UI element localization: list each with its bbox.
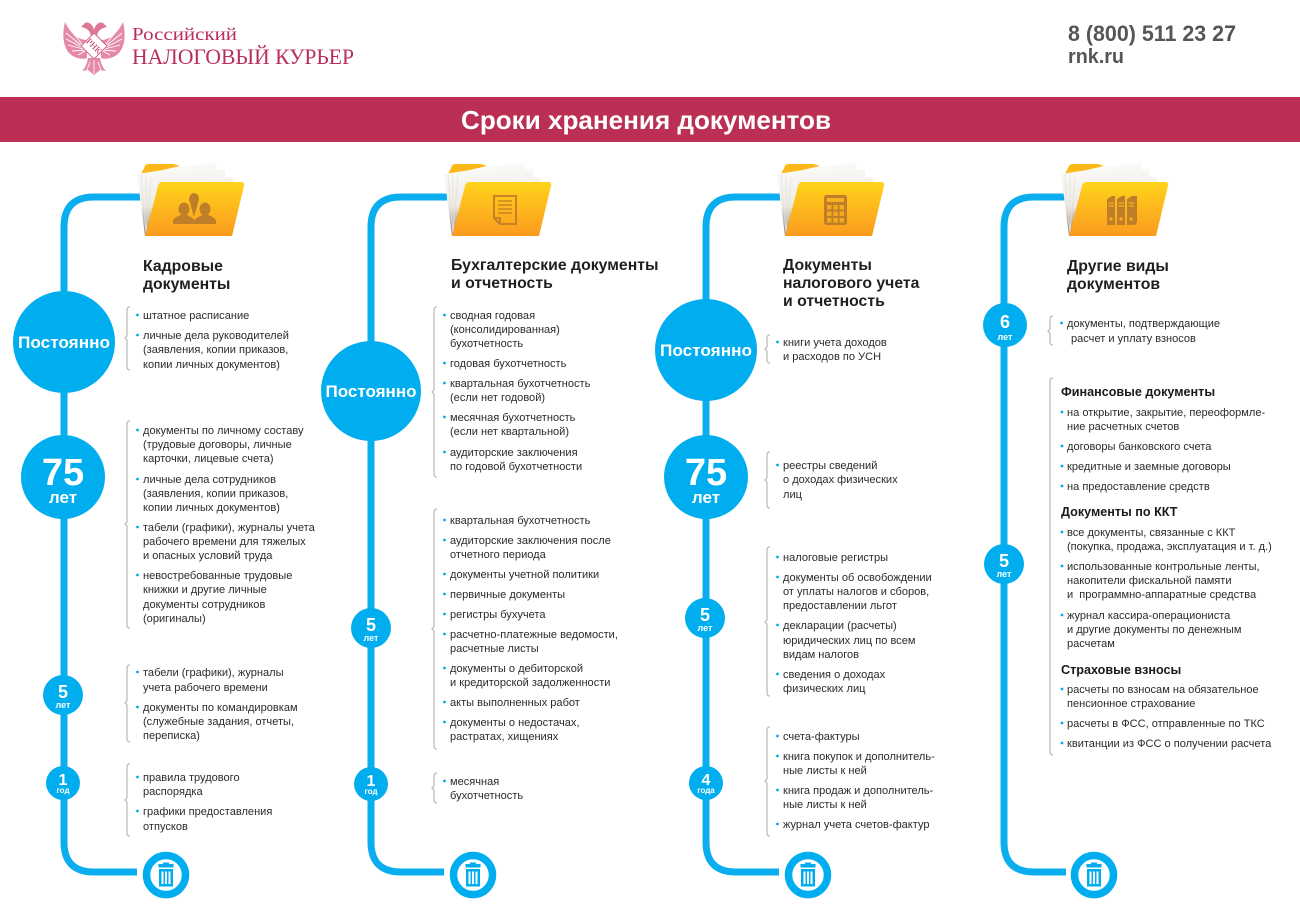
title banner — [0, 97, 1300, 142]
list: 75 лет: о доходах физических — [783, 474, 898, 486]
list: 1 год: бухотчетность — [450, 790, 523, 802]
list: 75 лет: лиц — [783, 489, 803, 501]
badge: 5 лет: 5 — [700, 605, 710, 625]
list: Постоянно: (если нет квартальной) — [450, 426, 569, 438]
list: 5 лет: документы об освобождении — [783, 572, 932, 584]
list: Постоянно: штатное расписание — [143, 310, 249, 322]
badge: Постоянно: Постоянно — [326, 382, 416, 401]
list: 5 лет: документы о недостачах, — [450, 717, 580, 729]
badge: 1 год: год — [56, 786, 70, 795]
list: 4 года — [765, 727, 935, 836]
list: 5 лет: декларации (расчеты) — [783, 620, 897, 632]
list: 5 лет: сведения о доходах — [783, 669, 886, 681]
heading: документы — [143, 276, 230, 293]
list: 1 год: месячная — [450, 776, 499, 788]
badge: 5 лет: 5 — [58, 682, 68, 702]
badge: Постоянно — [321, 341, 421, 441]
list: 5 лет: договоры банковского счета — [1067, 441, 1212, 453]
list: 5 лет: (покупка, продажа, эксплуатация и т. д.) — [1067, 541, 1272, 553]
badge: 4 года: года — [697, 786, 715, 795]
list: 5 лет: кредитные и заемные договоры — [1067, 461, 1231, 473]
badge: 6 лет: лет — [998, 332, 1013, 342]
list: Постоянно: аудиторские заключения — [450, 447, 578, 459]
icon: trash — [454, 856, 492, 894]
badge: 5 лет: лет — [364, 633, 379, 643]
list: 5 лет: отчетного периода — [450, 549, 547, 561]
list: Постоянно: квартальная бухотчетность — [450, 378, 591, 390]
timeline line — [64, 197, 140, 872]
list: 5 лет: ние расчетных счетов — [1067, 421, 1179, 433]
heading — [451, 257, 658, 292]
list: 5 лет: использованные контрольные ленты, — [1067, 561, 1260, 573]
list: 75 лет: документы сотрудников — [143, 599, 265, 611]
icon: folder with people — [137, 162, 244, 236]
list: Постоянно: бухотчетность — [450, 338, 523, 350]
list: 5 лет: документы по командировкам — [143, 702, 298, 714]
icon: trash — [788, 856, 828, 894]
badge: 4 года: 4 — [702, 772, 711, 789]
heading: Документы — [783, 257, 872, 274]
list: 5 лет: расчетные листы — [450, 643, 539, 655]
list: Постоянно: и расходов по УСН — [783, 351, 881, 363]
list: 5 лет: документы о дебиторской — [450, 663, 583, 675]
badge: 5 лет: 5 — [999, 551, 1009, 571]
list: 1 год: распорядка — [143, 786, 203, 798]
list: 5 лет: аудиторские заключения после — [450, 535, 611, 547]
heading: документов — [1067, 276, 1160, 293]
badge: 4 года — [689, 766, 723, 800]
list: Постоянно — [765, 335, 887, 363]
list: 5 лет — [1050, 378, 1272, 755]
list: 75 лет: рабочего времени для тяжелых — [143, 536, 306, 548]
subheading: Документы по ККТ: Документы по ККТ — [1061, 505, 1178, 519]
panel: Другие виды документов — [983, 162, 1272, 894]
list: 1 год — [432, 773, 523, 803]
panel: Документы налогового учета — [655, 162, 935, 894]
list: 4 года: книга покупок и дополнитель- — [783, 751, 935, 763]
list: 4 года: ные листы к ней — [783, 765, 867, 777]
list: 5 лет — [432, 509, 618, 749]
list: Постоянно: личные дела руководителей — [143, 330, 289, 342]
list: 5 лет: физических лиц — [783, 683, 866, 695]
list: 1 год: правила трудового — [143, 772, 240, 784]
list: 5 лет: юридических лиц по всем — [783, 635, 915, 647]
list: 5 лет: акты выполненных работ — [450, 697, 580, 709]
badge: 5 лет: 5 — [366, 615, 376, 635]
badge: 1 год: год — [364, 787, 378, 796]
list: 5 лет: документы учетной политики — [450, 569, 599, 581]
contacts: 8 (800) 511 23 27 — [1068, 21, 1236, 46]
list: 75 лет: (заявления, копии приказов, — [143, 488, 288, 500]
badge: 1 год — [354, 767, 388, 801]
badge: 5 лет — [351, 608, 391, 648]
badge: Постоянно — [655, 299, 757, 401]
list: 75 лет: реестры сведений — [783, 460, 877, 472]
list: 5 лет: и другие документы по денежным — [1067, 624, 1241, 636]
list: 5 лет: на предоставление средств — [1067, 481, 1210, 493]
badge: 5 лет — [984, 544, 1024, 584]
list: 5 лет: регистры бухучета — [450, 609, 546, 621]
list: 1 год: графики предоставления — [143, 806, 272, 818]
badge: 5 лет: лет — [997, 569, 1012, 579]
list: 1 год: отпусков — [143, 821, 188, 833]
list: 4 года: счета-фактуры — [783, 731, 860, 743]
list: 75 лет — [125, 421, 316, 628]
list: 75 лет: (трудовые договоры, личные — [143, 439, 292, 451]
list: 5 лет: табели (графики), журналы — [143, 667, 284, 679]
list: Постоянно — [432, 307, 591, 477]
list: 1 год — [125, 764, 272, 836]
heading — [783, 257, 920, 310]
list: 6 лет: расчет и уплату взносов — [1071, 333, 1196, 345]
badge: 1 год: 1 — [59, 772, 68, 789]
list: 6 лет — [1048, 316, 1220, 345]
list: 5 лет: (служебные задания, отчеты, — [143, 716, 294, 728]
badge: Постоянно: Постоянно — [18, 333, 110, 352]
list: 5 лет: от уплаты налогов и сборов, — [783, 586, 929, 598]
list: 5 лет: расчеты в ФСС, отправленные по ТКС — [1067, 718, 1265, 730]
heading: и отчетность — [451, 275, 553, 292]
list: 5 лет: расчетно-платежные ведомости, — [450, 629, 618, 641]
title banner: Сроки хранения документов — [461, 105, 831, 135]
list: 5 лет: на открытие, закрытие, переоформле- — [1067, 407, 1265, 419]
heading: и отчетность — [783, 293, 885, 310]
subheading: Страховые взносы: Страховые взносы — [1061, 663, 1181, 677]
badge: 6 лет: 6 — [1000, 312, 1010, 332]
list: 5 лет: учета рабочего времени — [143, 682, 268, 694]
heading: налогового учета — [783, 275, 920, 292]
badge: 75 лет: лет — [49, 488, 77, 507]
badge: 75 лет — [21, 435, 105, 519]
list: Постоянно: месячная бухотчетность — [450, 412, 576, 424]
badge: 75 лет: лет — [692, 488, 720, 507]
list: 4 года: книга продаж и дополнитель- — [783, 785, 934, 797]
list: 75 лет: (оригиналы) — [143, 613, 206, 625]
icon: double-headed eagle: РНК — [84, 36, 104, 56]
icon: double-headed eagle — [63, 22, 125, 75]
list: 75 лет: документы по личному составу — [143, 425, 304, 437]
list: 4 года: журнал учета счетов-фактур — [783, 819, 930, 831]
timeline line — [706, 197, 780, 872]
heading: Кадровые — [143, 258, 223, 275]
subheading: Финансовые документы: Финансовые документы — [1061, 385, 1215, 399]
list: 5 лет: видам налогов — [783, 649, 859, 661]
icon: trash — [1074, 856, 1114, 894]
icon: folder with document — [444, 162, 551, 236]
timeline line — [371, 197, 447, 872]
badge: 1 год — [46, 766, 80, 800]
icon: folder with calculator — [777, 162, 884, 236]
badge: 5 лет — [43, 675, 83, 715]
list: 75 лет: личные дела сотрудников — [143, 474, 276, 486]
badge: Постоянно: Постоянно — [660, 341, 752, 360]
list: 5 лет: первичные документы — [450, 589, 565, 601]
list: 5 лет: и кредиторской задолженности — [450, 677, 610, 689]
list: Постоянно: (консолидированная) — [450, 324, 560, 336]
panel: Бухгалтерские документы — [321, 162, 658, 894]
badge: 5 лет — [685, 598, 725, 638]
badge: 5 лет: лет — [698, 623, 713, 633]
badge: 1 год: 1 — [367, 773, 376, 790]
list: 5 лет: все документы, связанные с ККТ — [1067, 527, 1236, 539]
heading: Бухгалтерские документы — [451, 257, 658, 274]
logo wordmark — [132, 24, 354, 69]
badge: Постоянно — [13, 291, 115, 393]
list: Постоянно: сводная годовая — [450, 310, 535, 322]
logo wordmark: НАЛОГОВЫЙ КУРЬЕР — [132, 44, 354, 69]
logo wordmark: Российский — [132, 24, 237, 44]
badge: 75 лет: 75 — [685, 452, 727, 494]
badge: 75 лет — [664, 435, 748, 519]
list: 5 лет: квитанции из ФСС о получении расчета — [1067, 738, 1272, 750]
list: 5 лет: переписка) — [143, 730, 200, 742]
panel: Кадровые документы — [13, 162, 316, 894]
logo — [63, 22, 354, 75]
icon: folder with binders — [1061, 162, 1168, 236]
list: 6 лет: документы, подтверждающие — [1067, 318, 1220, 330]
badge: 5 лет: лет — [56, 700, 71, 710]
list: 5 лет: квартальная бухотчетность — [450, 515, 591, 527]
list: 5 лет: растратах, хищениях — [450, 731, 559, 743]
list: Постоянно: по годовой бухотчетности — [450, 461, 582, 473]
list: 75 лет — [765, 452, 898, 508]
heading — [143, 258, 230, 293]
list: 5 лет: пенсионное страхование — [1067, 698, 1195, 710]
badge: 75 лет: 75 — [42, 452, 84, 494]
list: 5 лет: расчеты по взносам на обязательное — [1067, 684, 1259, 696]
list: 5 лет — [765, 547, 932, 696]
heading — [1067, 258, 1169, 293]
list: Постоянно: копии личных документов) — [143, 359, 280, 371]
list: Постоянно: книги учета доходов — [783, 337, 887, 349]
list: 5 лет: предоставлении льгот — [783, 600, 897, 612]
list: 75 лет: книжки и другие личные — [143, 584, 267, 596]
contacts — [1068, 21, 1236, 68]
timeline line — [1004, 197, 1066, 872]
list: Постоянно: годовая бухотчетность — [450, 358, 567, 370]
list: 75 лет: копии личных документов) — [143, 502, 280, 514]
list: 5 лет: накопители фискальной памяти — [1067, 575, 1232, 587]
list: 5 лет: расчетам — [1067, 638, 1115, 650]
list: 4 года: ные листы к ней — [783, 799, 867, 811]
list: 75 лет: и опасных условий труда — [143, 550, 273, 562]
list: 75 лет: карточки, лицевые счета) — [143, 453, 274, 465]
list: 5 лет — [125, 665, 298, 742]
contacts: rnk.ru — [1068, 46, 1124, 68]
list: 75 лет: табели (графики), журналы учета — [143, 522, 316, 534]
list: Постоянно: (если нет годовой) — [450, 392, 545, 404]
list: Постоянно: (заявления, копии приказов, — [143, 344, 288, 356]
list: Постоянно — [125, 307, 289, 371]
list: 5 лет: журнал кассира-операциониста — [1067, 610, 1231, 622]
icon: trash — [146, 856, 186, 894]
heading: Другие виды — [1067, 258, 1169, 275]
badge: 6 лет — [983, 303, 1027, 347]
list: 5 лет: налоговые регистры — [783, 552, 888, 564]
list: 75 лет: невостребованные трудовые — [143, 570, 292, 582]
list: 5 лет: и программно-аппаратные средства — [1067, 589, 1257, 601]
